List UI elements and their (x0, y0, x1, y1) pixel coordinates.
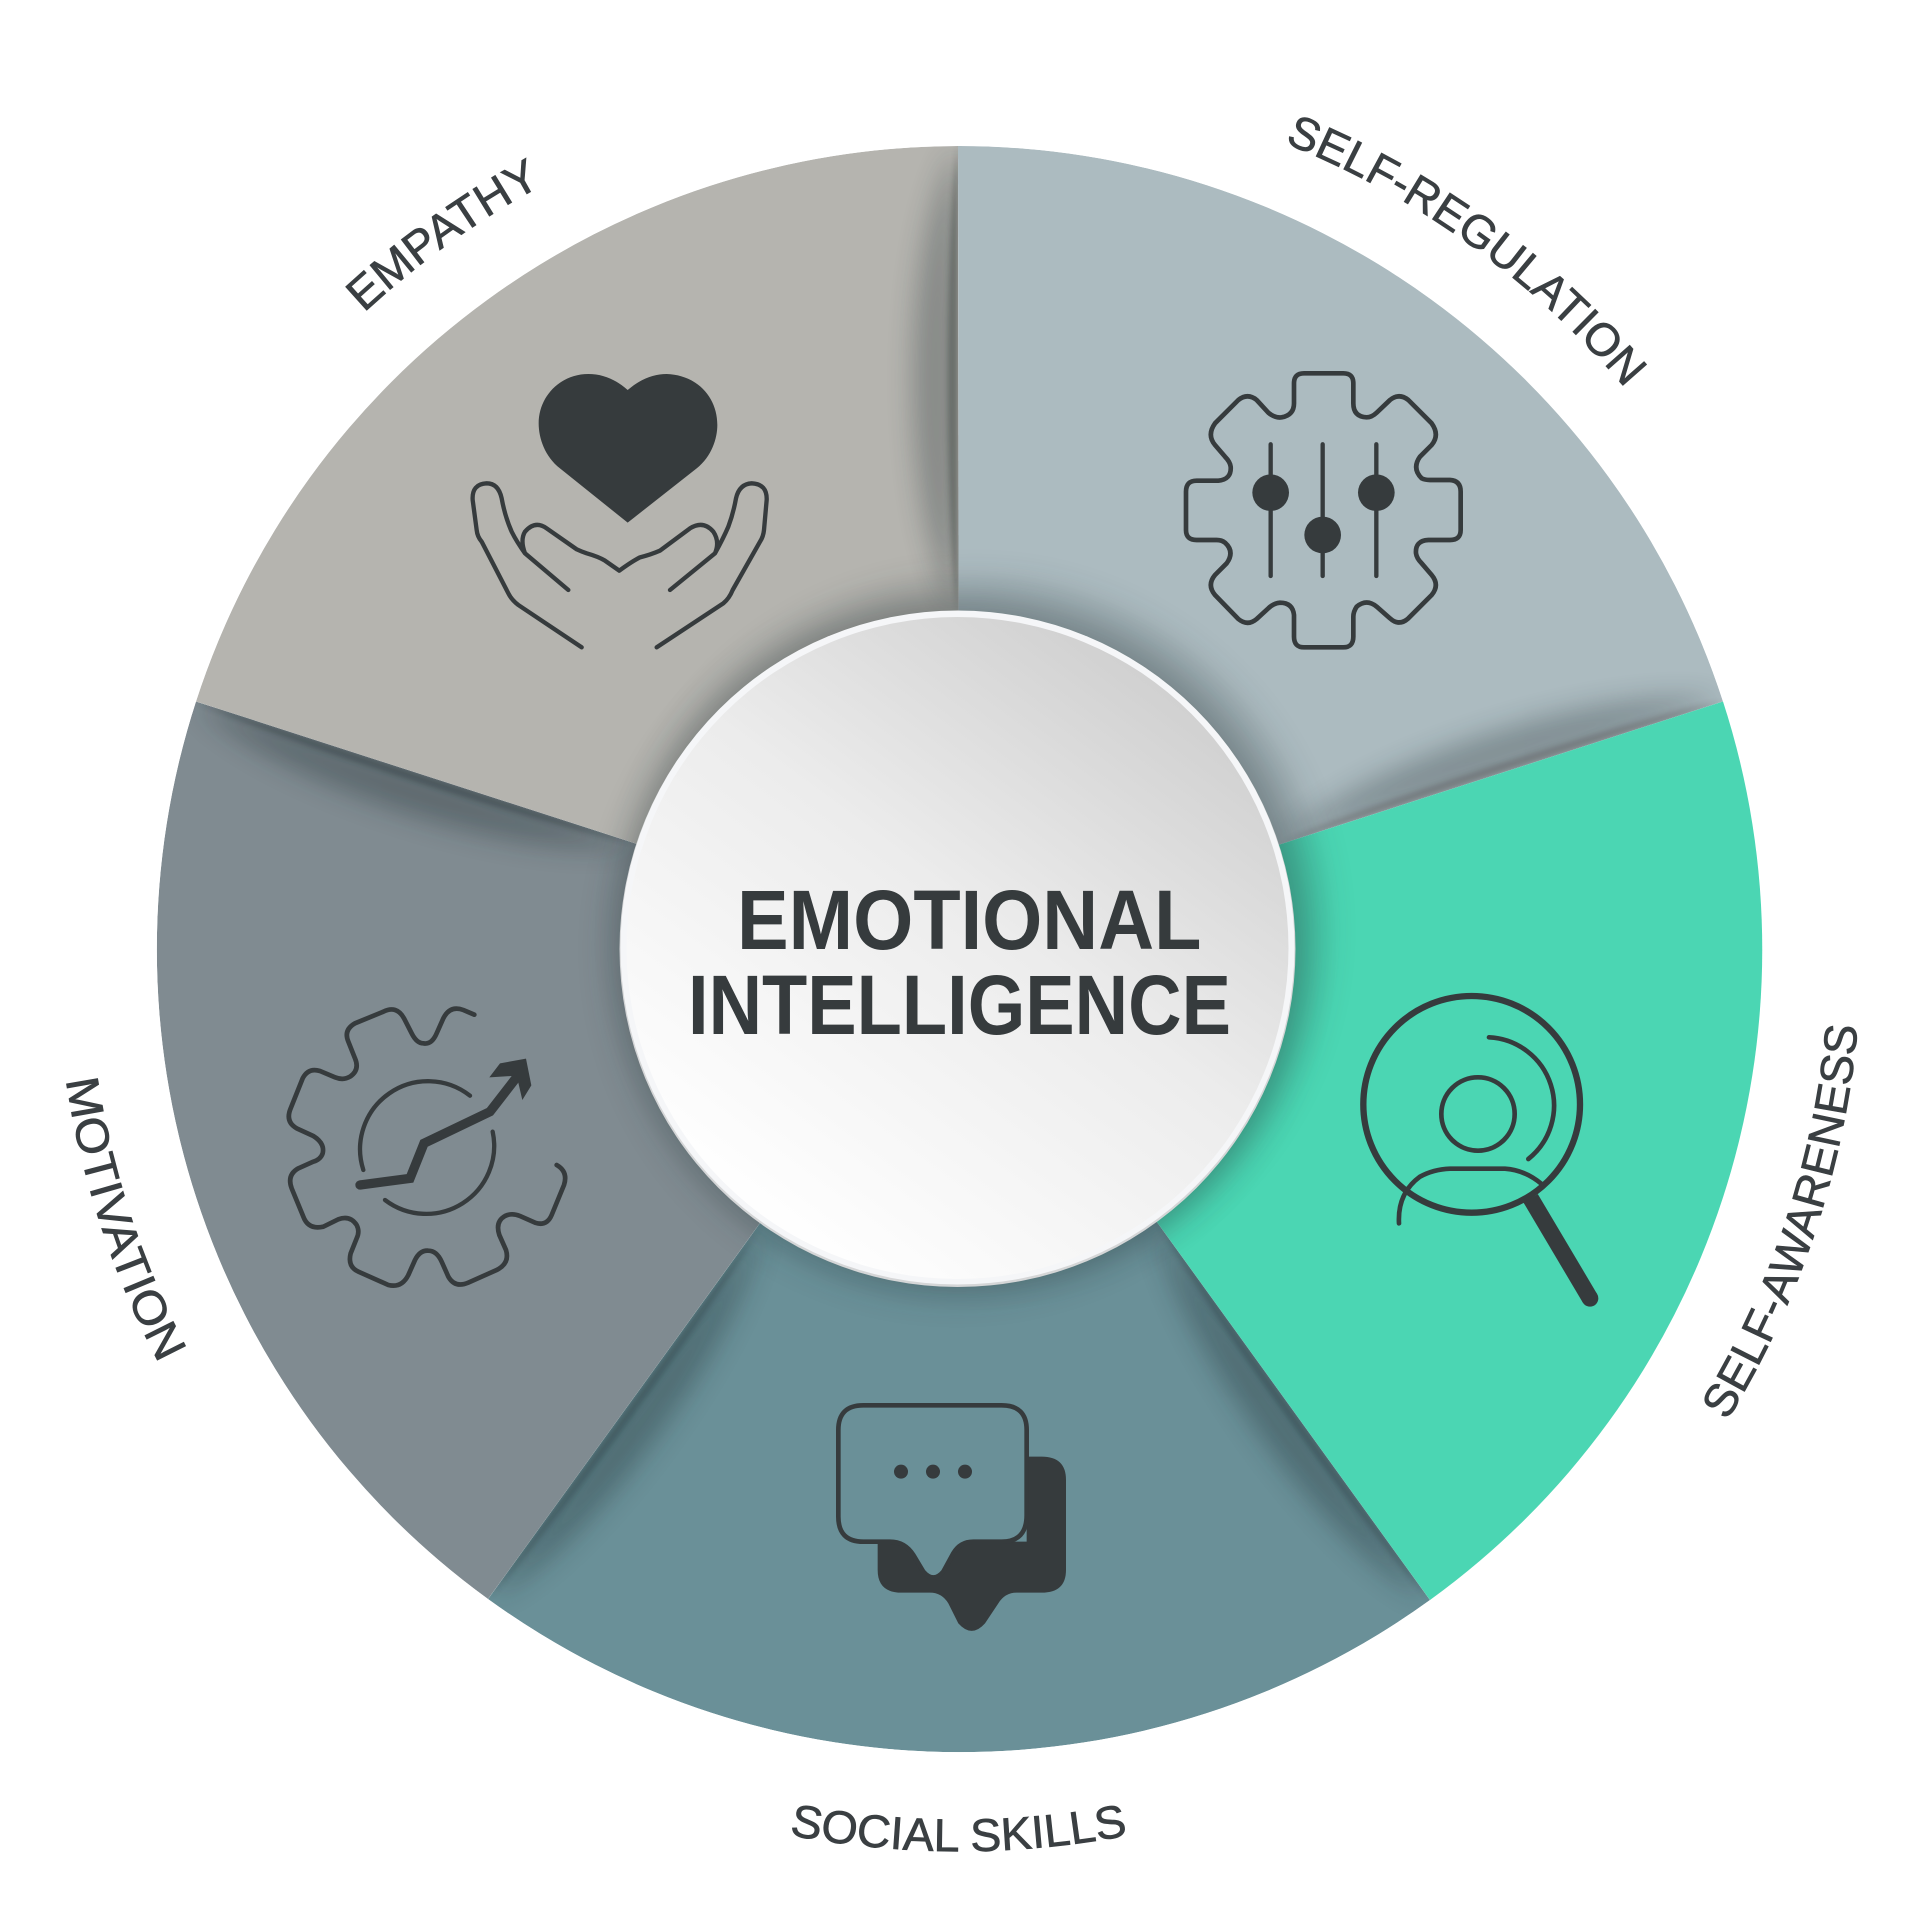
central disc (620, 610, 1296, 1287)
label: self-awareness: SELF-AWARENESS (1704, 1026, 1858, 1416)
central disc shadow (612, 582, 1323, 1294)
title: EMOTIONAL (737, 873, 1200, 967)
panel: empathy segment (196, 146, 958, 844)
icon: heart in hands (473, 374, 767, 647)
panel: self-awareness segment (959, 702, 1762, 1600)
panel: motivation segment (156, 702, 760, 1599)
title: INTELLIGENCE (688, 958, 1231, 1052)
panel: self-regulation segment (958, 146, 1723, 844)
icon: magnifier with person (1363, 996, 1598, 1307)
icon: gear with sliders (1186, 373, 1461, 647)
label: social skills: SOCIAL SKILLS (792, 1806, 1125, 1852)
panel: social skills segment (488, 1222, 1430, 1752)
icon: speech bubbles (838, 1405, 1066, 1631)
label: empathy: EMPATHY (345, 157, 532, 311)
label: self-regulation: SELF-REGULATION (1288, 117, 1647, 386)
icon: gear with rising arrow (289, 1009, 565, 1286)
label: motivation: MOTIVATION (66, 1078, 186, 1361)
